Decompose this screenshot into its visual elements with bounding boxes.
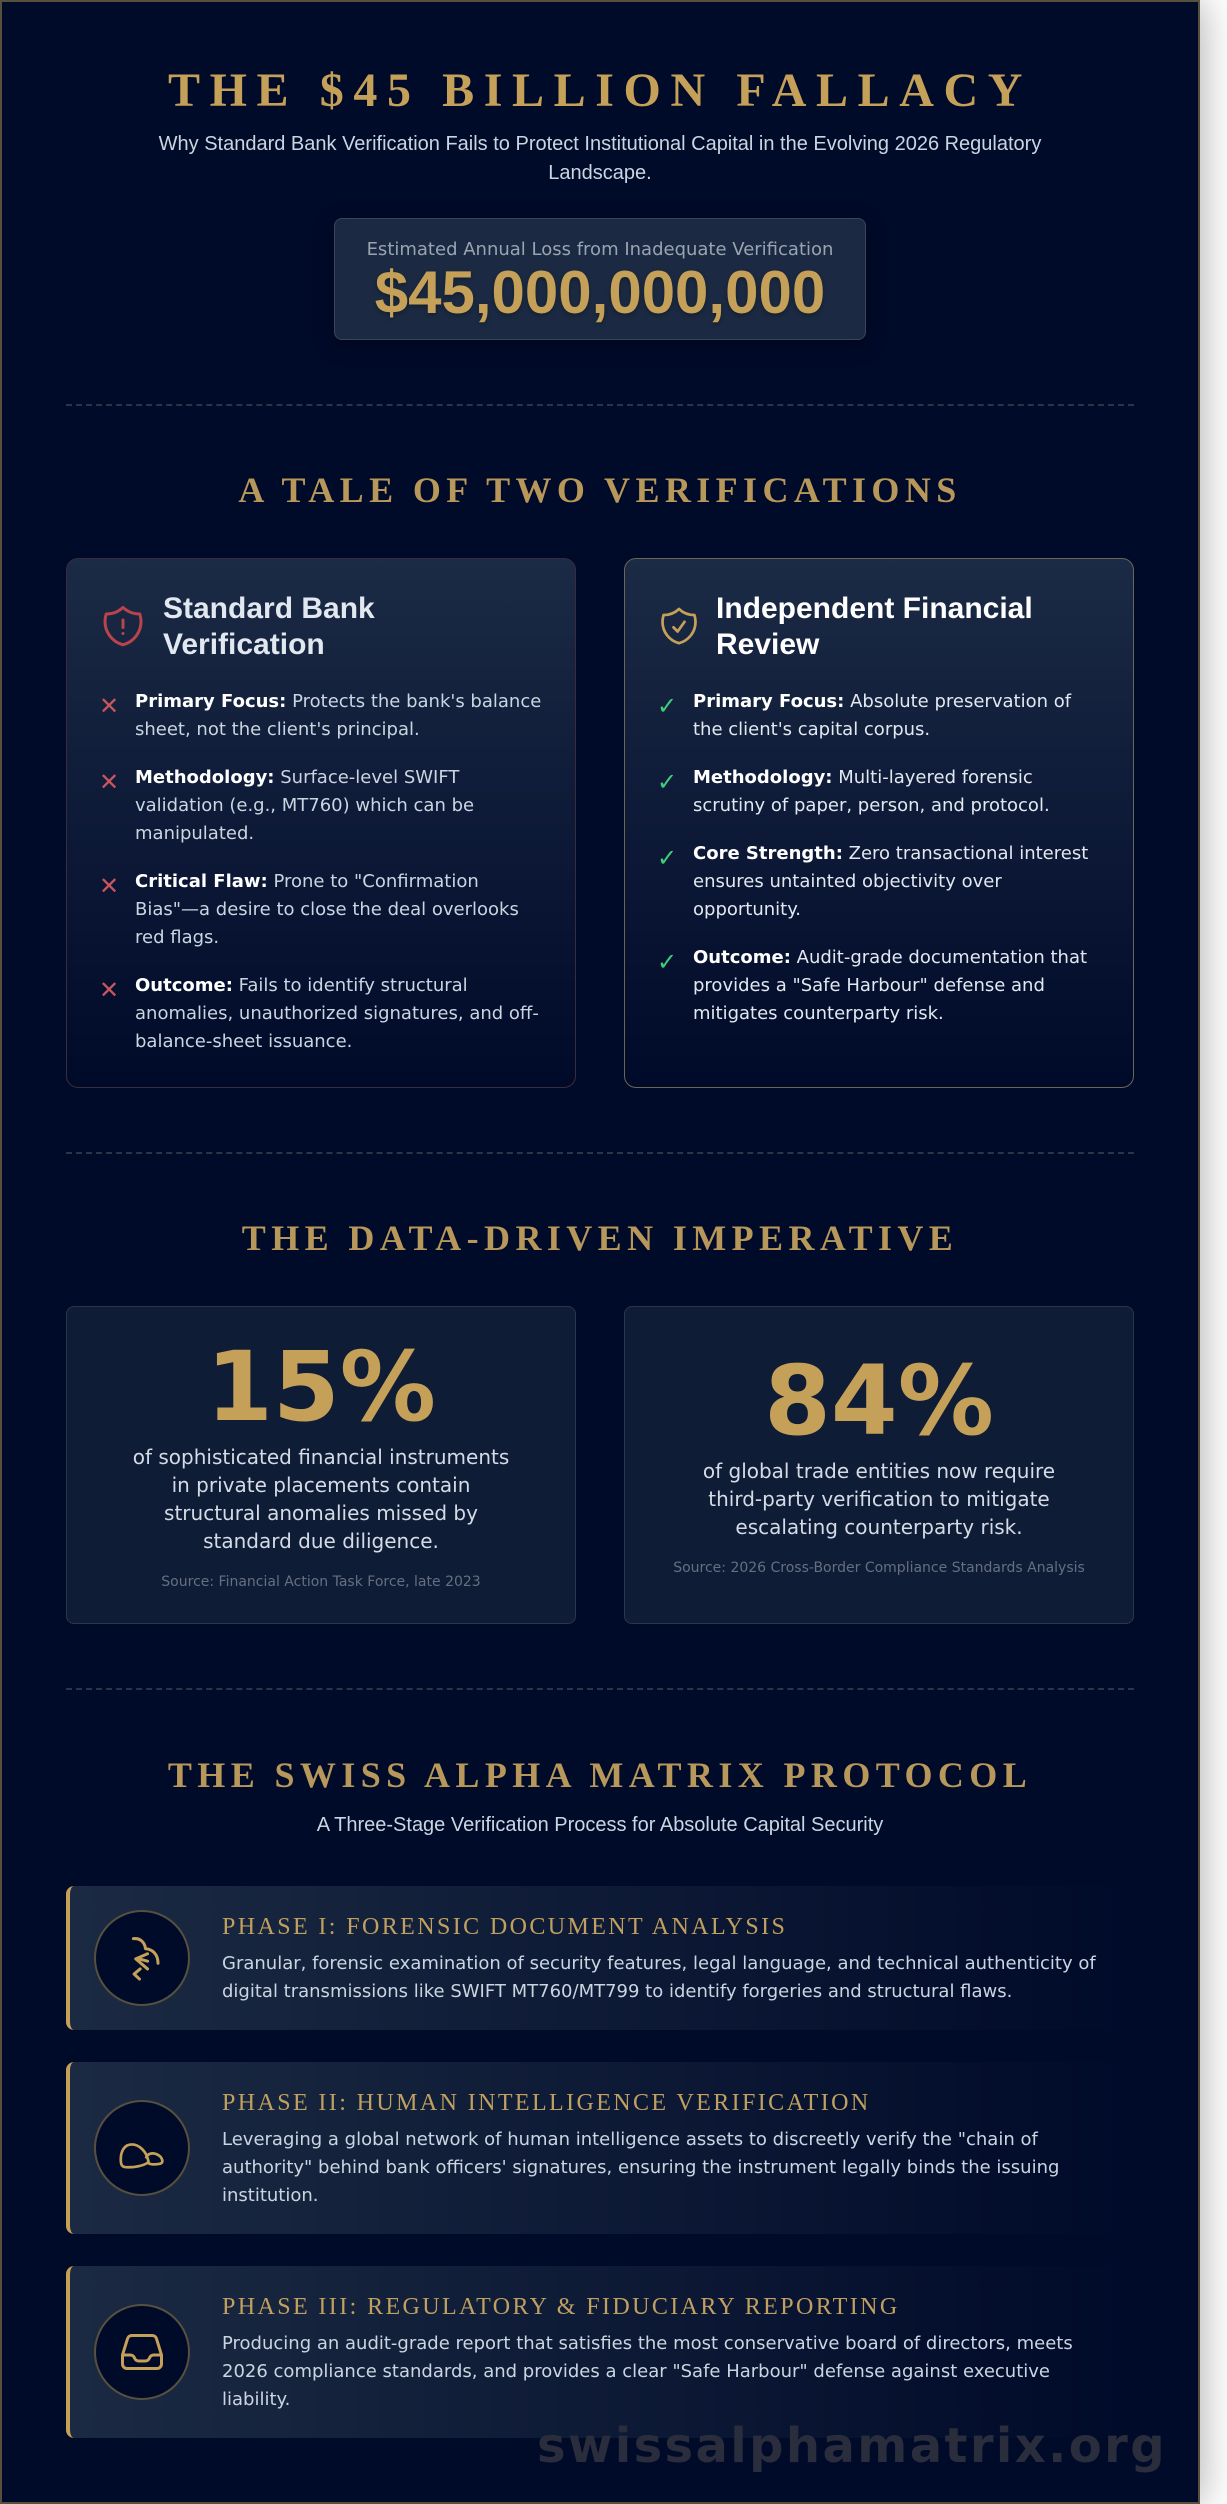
item: primary focus: Primary Focus: Absolute preservation of: [693, 691, 1071, 712]
subtitle: Landscape.: [548, 162, 652, 184]
check marker: ✓: [657, 948, 677, 976]
cross marker: ✕: [99, 872, 119, 900]
item: core strength: [657, 843, 1088, 920]
icon: shield warning: [104, 606, 142, 646]
panel: standard bank verification: [66, 558, 576, 1088]
icon: inbox tray: [94, 2304, 190, 2400]
heading: the data-driven imperative: THE DATA-DRIVEN IMPERATIVE: [242, 1218, 958, 1258]
item: methodology: manipulated.: [135, 823, 254, 844]
item: outcome: Outcome: Audit-grade documentation that: [693, 947, 1087, 968]
item: methodology: validation (e.g., MT760) which can be: [135, 795, 474, 816]
panel heading: Independent Financial: [716, 592, 1033, 625]
item: outcome: Outcome: Fails to identify structural: [135, 975, 468, 996]
stat value: 84%: [764, 1345, 994, 1457]
subtitle: [158, 133, 1042, 184]
stat source: Source: Financial Action Task Force, late 2023: [161, 1574, 481, 1590]
stat description: of global trade entities now require: [703, 1459, 1055, 1483]
item: critical flaw: [99, 871, 519, 948]
panel heading: Verification: [163, 628, 325, 661]
callout label: Estimated Annual Loss from Inadequate Verification: [367, 239, 833, 260]
item: outcome: [99, 975, 539, 1052]
panel heading: Standard Bank: [163, 592, 375, 625]
stat value: 15%: [206, 1331, 436, 1443]
item: primary focus: sheet, not the client's principal.: [135, 719, 420, 740]
panel: phase 2: [66, 2062, 1134, 2234]
stat description: [133, 1445, 509, 1553]
phase description: 2026 compliance standards, and provides a clear "Safe Harbour" defense against executive: [222, 2361, 1050, 2382]
phase description: [222, 1953, 1096, 2002]
panel: phase 1: [66, 1886, 1134, 2030]
phase description: Granular, forensic examination of security features, legal language, and technical authenticity of: [222, 1953, 1096, 1974]
phase heading: PHASE II: HUMAN INTELLIGENCE VERIFICATION: [222, 2090, 871, 2116]
check marker: ✓: [657, 768, 677, 796]
stat description: [703, 1459, 1055, 1539]
stat description: standard due diligence.: [203, 1529, 439, 1553]
cross marker: ✕: [99, 768, 119, 796]
item: outcome: provides a "Safe Harbour" defense and: [693, 975, 1045, 996]
check marker: ✓: [657, 692, 677, 720]
phase heading: PHASE I: FORENSIC DOCUMENT ANALYSIS: [222, 1914, 787, 1940]
item: primary focus: the client's capital corpus.: [693, 719, 930, 740]
item: core strength: Core Strength: Zero transactional interest: [693, 843, 1088, 864]
panel heading: [716, 592, 1033, 661]
item: critical flaw: Critical Flaw: Prone to "Confirmation: [135, 871, 479, 892]
section subtitle: A Three-Stage Verification Process for Absolute Capital Security: [317, 1814, 883, 1836]
heading: the swiss alpha matrix protocol: THE SWISS ALPHA MATRIX PROTOCOL: [168, 1755, 1032, 1795]
phase description: liability.: [222, 2389, 290, 2410]
panel: independent financial review: [624, 558, 1134, 1088]
phase description: Leveraging a global network of human intelligence assets to discreetly verify the "chain of: [222, 2129, 1038, 2150]
heading: a tale of two verifications: A TALE OF TWO VERIFICATIONS: [238, 470, 962, 510]
item: primary focus: [99, 691, 541, 740]
phase heading: PHASE III: REGULATORY & FIDUCIARY REPORTING: [222, 2294, 900, 2320]
stat description: of sophisticated financial instruments: [133, 1445, 509, 1469]
subtitle: Why Standard Bank Verification Fails to Protect Institutional Capital in the Evolving 2026 Regulatory: [159, 133, 1041, 155]
callout: estimated annual loss: [334, 218, 866, 340]
item: outcome: mitigates counterparty risk.: [693, 1003, 944, 1024]
stat description: third-party verification to mitigate: [708, 1487, 1050, 1511]
cross marker: ✕: [99, 976, 119, 1004]
title: THE $45 BILLION FALLACY: [168, 64, 1032, 117]
phase description: [222, 2129, 1059, 2206]
panel heading: [163, 592, 375, 661]
phase description: digital transmissions like SWIFT MT760/MT799 to identify forgeries and structural flaws.: [222, 1981, 1012, 2002]
item: methodology: [99, 767, 474, 844]
item: critical flaw: Bias"—a desire to close the deal overlooks: [135, 899, 519, 920]
item: outcome: anomalies, unauthorized signatures, and off-: [135, 1003, 539, 1024]
panel: phase 3: [66, 2266, 1134, 2438]
item: primary focus: Primary Focus: Protects the bank's balance: [135, 691, 541, 712]
item: primary focus: [657, 691, 1072, 740]
item: critical flaw: red flags.: [135, 927, 219, 948]
item: core strength: opportunity.: [693, 899, 801, 920]
phase description: Producing an audit-grade report that satisfies the most conservative board of directors, meets: [222, 2333, 1073, 2354]
item: outcome: balance-sheet issuance.: [135, 1031, 352, 1052]
item: methodology: Methodology: Surface-level SWIFT: [135, 767, 459, 788]
stat description: structural anomalies missed by: [164, 1501, 478, 1525]
stat description: escalating counterparty risk.: [735, 1515, 1023, 1539]
check marker: ✓: [657, 844, 677, 872]
item: outcome: [657, 947, 1087, 1024]
item: core strength: ensures untainted objectivity over: [693, 871, 1002, 892]
panel heading: Review: [716, 628, 819, 661]
watermark: swissalphamatrix.org: [537, 2418, 1167, 2474]
phase description: [222, 2333, 1073, 2410]
icon: shield check: [661, 608, 697, 644]
phase description: institution.: [222, 2185, 319, 2206]
item: methodology: Methodology: Multi-layered forensic: [693, 767, 1033, 788]
phase description: authority" behind bank officers' signatures, ensuring the instrument legally binds the issuing: [222, 2157, 1059, 2178]
stat description: in private placements contain: [172, 1473, 470, 1497]
icon: network fragment: [94, 2100, 190, 2196]
icon: fingerprint fragment: [94, 1910, 190, 2006]
callout value: $45,000,000,000: [375, 259, 825, 326]
item: methodology: [657, 767, 1050, 816]
cross marker: ✕: [99, 692, 119, 720]
panel: stat 84%: [624, 1306, 1134, 1624]
item: methodology: scrutiny of paper, person, and protocol.: [693, 795, 1050, 816]
panel: stat 15%: [66, 1306, 576, 1624]
stat source: Source: 2026 Cross-Border Compliance Standards Analysis: [673, 1560, 1085, 1576]
